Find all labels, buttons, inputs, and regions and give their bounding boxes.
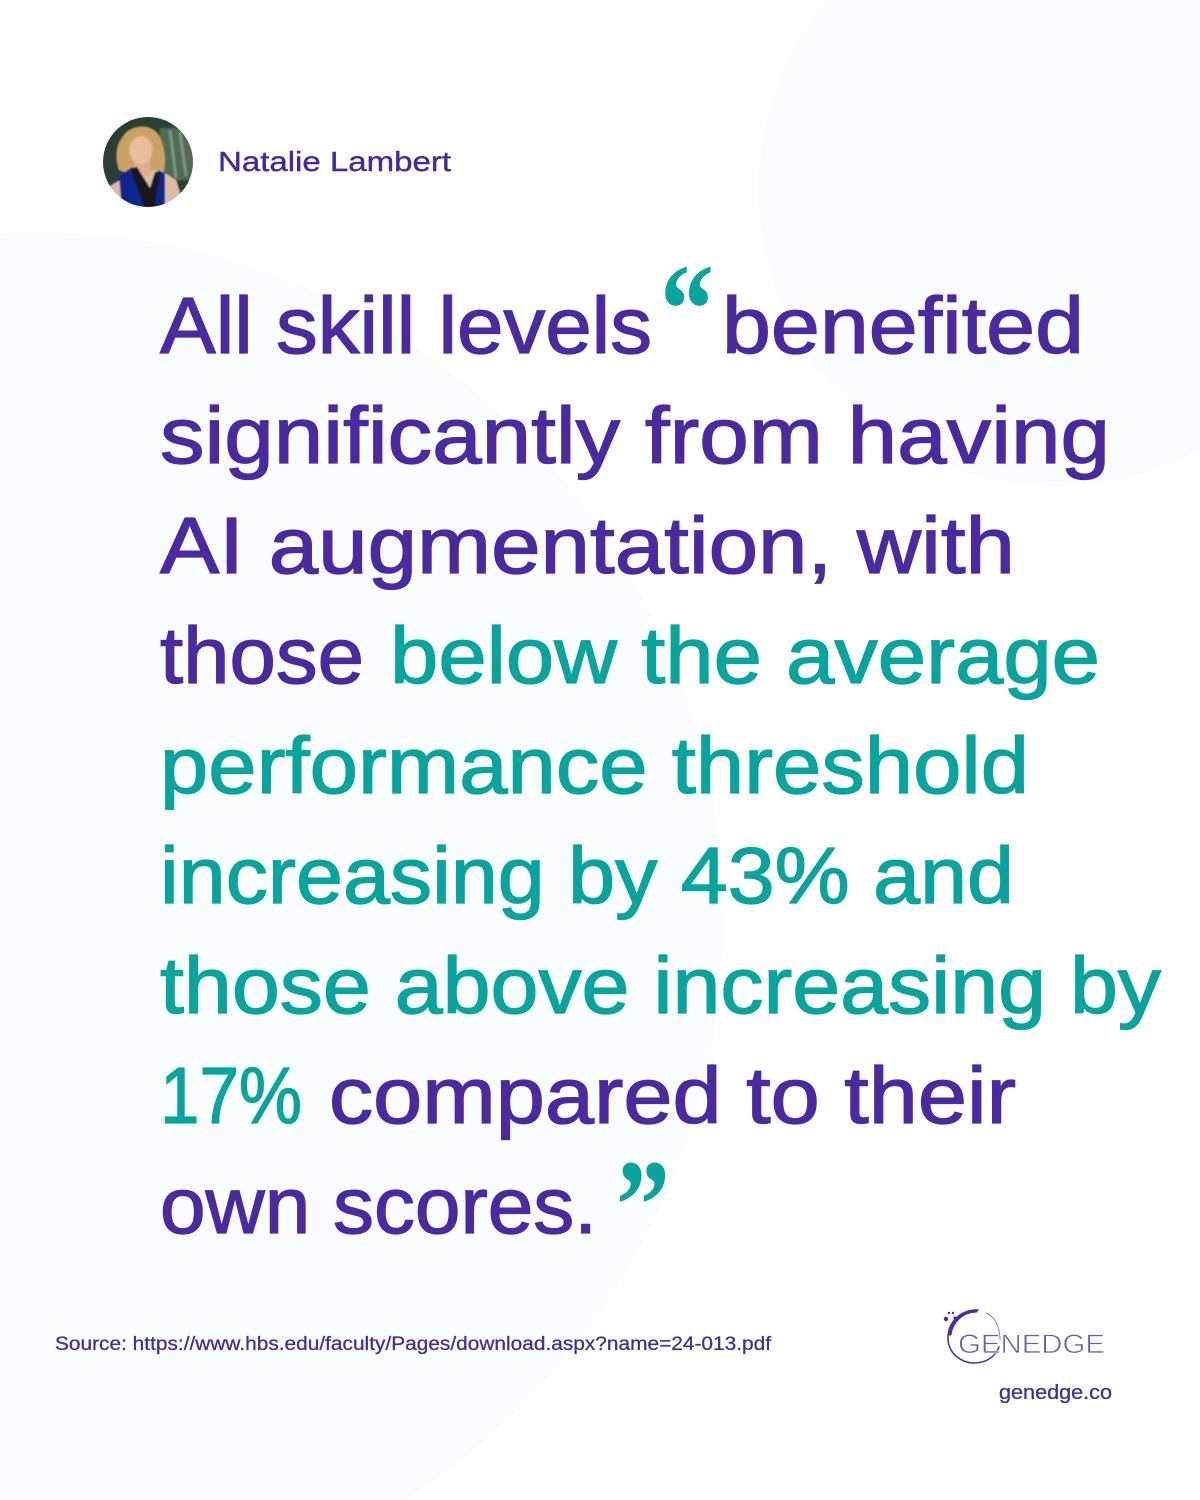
closing quotation mark: ”: [616, 1134, 670, 1278]
logo wordmark: GENEDGE: [958, 1329, 1105, 1359]
logo dots: [944, 1312, 957, 1321]
logo: Genedge: [944, 1310, 1105, 1363]
background shape: top right circle: [759, 0, 1200, 486]
quote line 4: below the average: [390, 611, 1100, 700]
website: genedge.co: [999, 1382, 1112, 1404]
source line: Source: https://www.hbs.edu/faculty/Pages/download.aspx?name=24-013.pdf: [55, 1334, 772, 1355]
logo ring: [948, 1310, 1000, 1363]
background shape: lower left circle: [0, 232, 723, 1500]
quote line 8: compared to their: [329, 1051, 1016, 1140]
quote text: [160, 281, 1161, 1250]
author name: Natalie Lambert: [218, 146, 451, 177]
quote line 1: benefited: [722, 281, 1084, 370]
quote line 9: own scores.: [160, 1161, 597, 1250]
infographic canvas: [56, 117, 1162, 1404]
quote line 7: those above increasing by: [160, 941, 1161, 1030]
quote line 6: increasing by 43% and: [160, 831, 1014, 920]
quote line 4: [160, 611, 1100, 700]
quote line 2: significantly from having: [160, 391, 1110, 480]
quote line 5: performance threshold: [160, 721, 1029, 810]
author avatar: [103, 117, 193, 207]
quote line 1: All skill levels: [160, 281, 652, 370]
quote line 1: [160, 281, 1084, 370]
opening quotation mark: “: [660, 238, 714, 382]
quote line 8: 17%: [160, 1051, 302, 1140]
quote line 4: those: [160, 611, 364, 700]
quote line 3: AI augmentation, with: [160, 501, 1015, 590]
